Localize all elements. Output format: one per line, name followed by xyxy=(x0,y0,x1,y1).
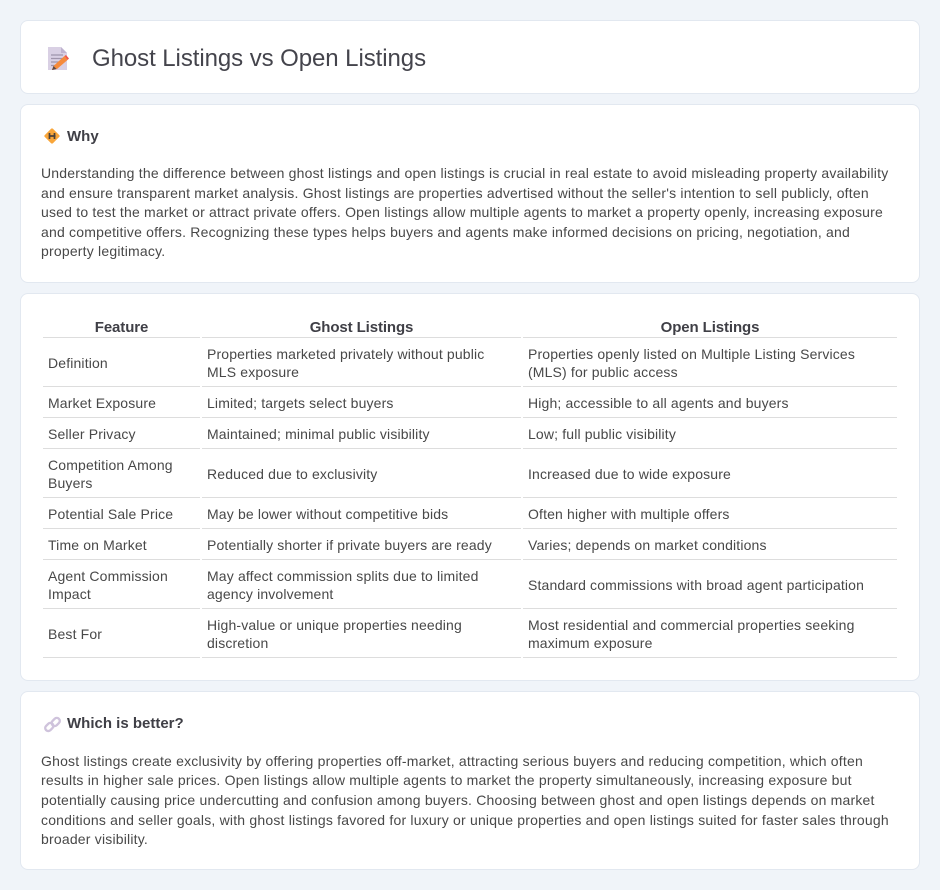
text: which is better paragraph xyxy=(41,753,889,847)
comparison table: (MLS) for public access xyxy=(528,364,678,380)
comparison table: Varies; depends on market conditions xyxy=(528,537,767,553)
panel: comparison table xyxy=(20,293,920,681)
comparison table: Properties marketed privately without public xyxy=(207,346,484,362)
comparison table: Maintained; minimal public visibility xyxy=(207,426,430,442)
comparison table: Seller Privacy xyxy=(48,426,136,442)
comparison table: High-value or unique properties needing xyxy=(207,617,462,633)
comparison table: Often higher with multiple offers xyxy=(528,506,730,522)
heading: why: Why xyxy=(67,128,99,145)
comparison table: Open Listings xyxy=(661,319,759,336)
comparison table: Reduced due to exclusivity xyxy=(207,466,377,482)
comparison table: Potentially shorter if private buyers are ready xyxy=(207,537,492,553)
comparison table: agency involvement xyxy=(207,586,333,602)
text: why paragraph: Understanding the difference between ghost listings and open listings is crucial in real estate to avoid misleading property availability xyxy=(41,165,888,181)
comparison table: May affect commission splits due to limited xyxy=(207,568,479,584)
comparison table: Standard commissions with broad agent participation xyxy=(528,577,864,593)
comparison table: Agent Commission xyxy=(48,568,168,584)
comparison table: Buyers xyxy=(48,475,92,491)
text: which is better paragraph: results in higher sale prices. Open listings allow multiple agents to market the property simultaneously, increasing exposure but xyxy=(41,772,852,788)
icon: memo with pencil xyxy=(48,47,69,70)
panel: which is better xyxy=(20,691,920,870)
heading: which is better: Which is better? xyxy=(67,715,184,732)
comparison table: Time on Market xyxy=(48,537,147,553)
comparison table: Most residential and commercial properties seeking xyxy=(528,617,855,633)
comparison table: Increased due to wide exposure xyxy=(528,466,731,482)
comparison table: Ghost Listings xyxy=(310,319,413,336)
text: which is better paragraph: potentially causing price undercutting and confusion among buyers. Choosing between ghost and open listings depends on market xyxy=(41,792,875,808)
icon: link xyxy=(44,716,61,732)
comparison table: Definition xyxy=(48,355,108,371)
comparison table: Potential Sale Price xyxy=(48,506,173,522)
title text: Ghost Listings vs Open Listings xyxy=(92,44,426,72)
text: why paragraph: used to test the market or attract private offers. Open listings allow multiple agents to market a property openly, increasing exposure xyxy=(41,204,883,220)
comparison table: Competition Among xyxy=(48,457,173,473)
comparison table: Best For xyxy=(48,626,102,642)
comparison table: Low; full public visibility xyxy=(528,426,676,442)
comparison table: MLS exposure xyxy=(207,364,299,380)
comparison table: Limited; targets select buyers xyxy=(207,395,394,411)
comparison table: High; accessible to all agents and buyers xyxy=(528,395,789,411)
comparison table: Market Exposure xyxy=(48,395,156,411)
panel: why xyxy=(20,104,920,283)
text: why paragraph: and competitive offers. Recognizing these types helps buyers and agents make informed decisions on pricing, negotiation, and xyxy=(41,224,850,240)
comparison table: Feature xyxy=(95,319,148,336)
comparison table: May be lower without competitive bids xyxy=(207,506,448,522)
comparison table xyxy=(43,319,897,658)
text: why paragraph: and ensure transparent market analysis. Ghost listings are properties advertised without the seller's intention to sell publicly, often xyxy=(41,185,869,201)
comparison table: Impact xyxy=(48,586,91,602)
comparison table: maximum exposure xyxy=(528,635,653,651)
text: which is better paragraph: conditions and seller goals, with ghost listings favored for luxury or unique properties and open listings suited for faster sales through xyxy=(41,812,889,828)
comparison table: Properties openly listed on Multiple Listing Services xyxy=(528,346,855,362)
text: which is better paragraph: Ghost listings create exclusivity by offering properties off-market, attracting serious buyers and reducing competition, which often xyxy=(41,753,863,769)
text: why paragraph: property legitimacy. xyxy=(41,243,165,259)
panel: title xyxy=(20,20,920,94)
icon: diamond road sign xyxy=(44,128,60,144)
comparison table: discretion xyxy=(207,635,268,651)
text: which is better paragraph: broader visibility. xyxy=(41,831,148,847)
text: why paragraph xyxy=(41,165,888,259)
